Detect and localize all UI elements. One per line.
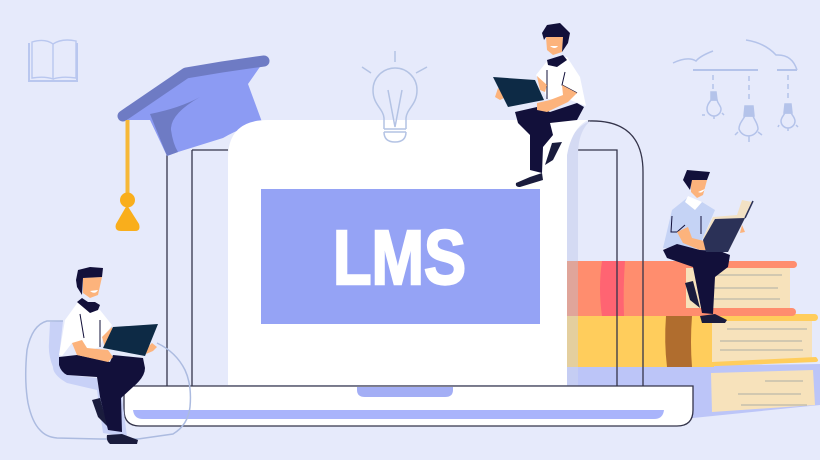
beanbag [49, 321, 127, 437]
open book pages [703, 200, 752, 252]
laptop base [124, 386, 693, 426]
laptop [103, 324, 158, 356]
front shoe [516, 173, 543, 187]
book stack [567, 261, 820, 418]
head [83, 277, 102, 298]
trousers [663, 244, 730, 314]
person: right reading [663, 170, 753, 323]
laptop screen [228, 120, 567, 385]
arm [537, 85, 577, 112]
head [691, 180, 707, 198]
trousers [59, 355, 145, 432]
icon: cloud and hanging bulbs [673, 40, 798, 142]
back shoe [92, 398, 108, 427]
LMS label: LMS [333, 215, 466, 301]
dark book [703, 218, 745, 252]
book: blue [567, 364, 820, 418]
person: top sitting on screen [493, 23, 586, 187]
lid side strip [567, 121, 590, 261]
back shoe [685, 281, 700, 308]
shirt [663, 198, 715, 248]
arm [677, 227, 710, 250]
arm [72, 340, 113, 362]
icon: light bulb [362, 51, 427, 142]
front shoe [107, 434, 138, 444]
shirt [59, 302, 112, 356]
back shoe [545, 142, 562, 165]
book: orange [567, 261, 797, 316]
laptop lid outlines [167, 121, 643, 386]
trousers [515, 103, 584, 173]
book: yellow [567, 314, 818, 367]
person: left with beanbag [26, 267, 190, 444]
head [546, 37, 563, 55]
front shoe [700, 314, 727, 323]
graduation cap [116, 61, 264, 231]
icon: open book outline [29, 40, 77, 81]
tassel [116, 120, 140, 231]
LMS panel [261, 189, 540, 324]
laptop [493, 77, 544, 107]
shirt [536, 57, 586, 106]
